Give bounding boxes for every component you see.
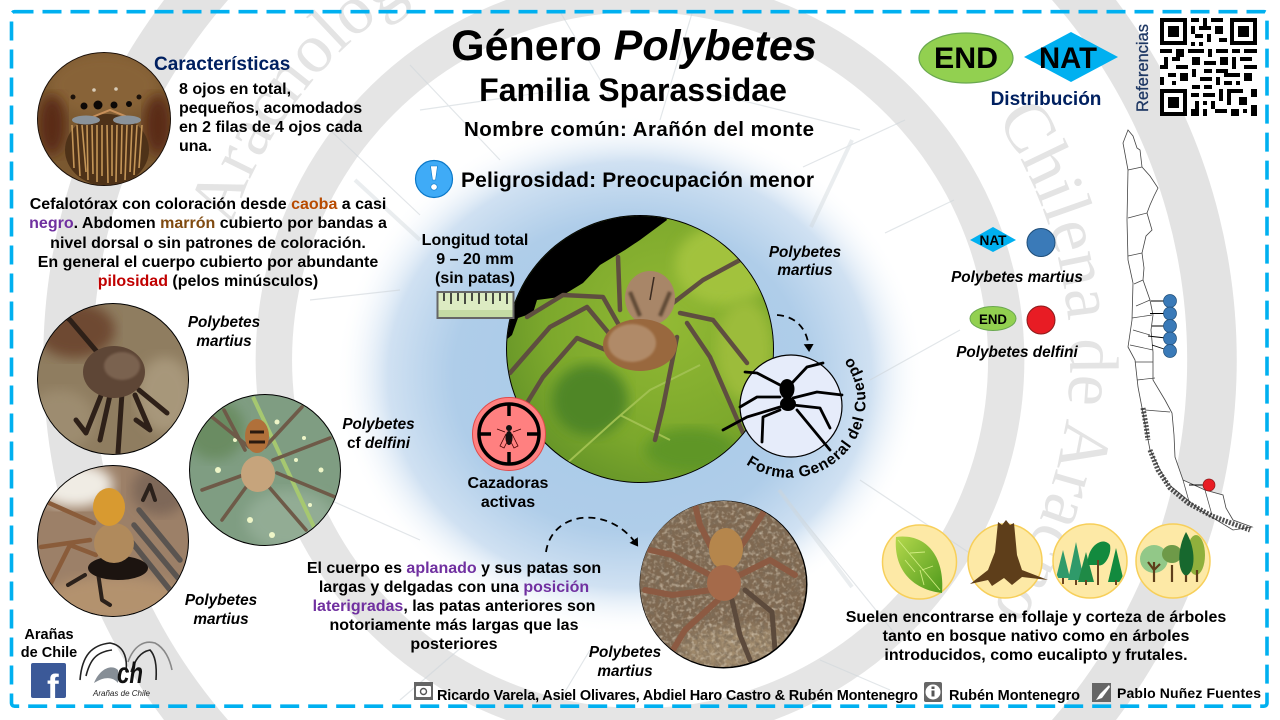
text credit: Rubén Montenegro [949,688,1080,704]
red distribution dot [1189,479,1215,491]
photo: Polybetes martius orange [37,463,189,624]
photo: Polybetes cf delfini [185,394,341,550]
icon: ruler [438,292,514,318]
text block: body shape: El cuerpo es aplanado y sus patas son [307,560,601,577]
credits [414,682,1261,704]
spider silhouette [723,363,842,450]
caption: Polybetes [188,314,260,331]
label: activas [481,494,535,511]
blue glow behind main photo [335,115,925,635]
photo: Polybetes martius dark [37,303,189,455]
society logo: Arañas de Chile [92,689,151,698]
dashed arrow to bottom photo [546,518,637,552]
blue dot [1027,228,1055,256]
caption [342,416,415,452]
text block: body shape: laterigradas, las patas anteriores son [313,598,595,615]
legend: Polybetes delfini [956,306,1079,361]
icon: camera [414,682,433,700]
eyes text: 8 ojos en total, [179,81,291,98]
caption [769,244,841,279]
title [451,22,817,141]
caption: martius [193,611,249,628]
icon: trunk [968,520,1048,598]
panel: characteristics [36,50,362,186]
text block: habitat: tanto en bosque nativo como en árboles [883,628,1189,645]
family name: Familia Sparassidae [479,72,787,108]
watermark: web lines [310,10,980,700]
badge: NAT: NAT [1039,42,1097,75]
badge: NAT small: NAT [980,232,1007,248]
danger text: Peligrosidad: Preocupación menor [461,169,814,192]
society logo [80,642,172,698]
caption [185,592,257,628]
eyes text: pequeños, acomodados [179,100,362,117]
references label: Referencias [1134,24,1152,112]
facebook page [21,627,77,707]
habitat icons [882,520,1210,599]
photo credit: Ricardo Varela, Asiel Olivares, Abdiel Haro Castro & Rubén Montenegro [437,688,918,704]
text block: habitat: Suelen encontrarse en follaje y corteza de árboles [846,609,1226,626]
title: Género Polybetes [451,22,817,70]
text block: coloration: nivel dorsal o sin patrones de coloración. [50,235,366,252]
heading: Características [154,54,290,75]
danger level [416,160,814,198]
text block: coloration: pilosidad (pelos minúsculos) [98,273,318,290]
region lines [1128,167,1212,515]
badge: END: END [934,42,998,75]
eyes text: una. [179,138,212,155]
facebook page: Arañas [24,627,74,643]
caption: Polybetes [185,592,257,609]
badge: END [919,33,1013,83]
QR code [1160,18,1257,116]
text block: coloration: Cefalotórax con coloración desde caoba a casi [30,196,386,213]
society logo: ch [117,657,143,690]
logo: Arañas de Chile [21,627,172,707]
common name: Nombre común: Arañón del monte [464,118,814,141]
eyes text [179,81,362,155]
caption: Polybetes [769,244,841,261]
legend: Polybetes martius [951,227,1083,286]
dashed arrow to body shape [777,315,809,350]
blue distribution dots [1148,294,1176,358]
text block: coloration: En general el cuerpo cubierto por abundante [38,254,378,271]
caption: martius [196,333,252,350]
icon: active hunters target [472,398,546,470]
map of Chile [1123,130,1252,530]
caption: Polybetes [589,644,661,661]
body length [422,232,528,318]
text block: coloration [29,196,387,290]
facebook page: f [47,668,59,707]
caption: cf delfini [347,435,411,452]
leaf [506,215,774,483]
body shape silhouette [722,354,866,478]
dark background corner [508,216,667,339]
distribution badges [919,32,1118,110]
label: Distribución [991,89,1101,110]
caption: Polybetes [342,416,415,433]
body length: (sin patas) [435,270,515,287]
red dot [1027,306,1055,334]
caption: martius [777,262,833,279]
main photo: Polybetes martius [500,205,775,483]
text block: body shape: posteriores [410,636,498,653]
icon: leaf [882,525,956,599]
text block: body shape: largas y delgadas con una posición [319,579,589,596]
caption: martius [597,663,653,680]
southern islands [1143,408,1250,530]
label [468,475,549,511]
facebook page: de Chile [21,645,77,661]
caption [188,314,260,350]
badge: NAT [1024,32,1118,82]
icon: alert [416,160,452,198]
body length: Longitud total [422,232,528,249]
eyes text: en 2 filas de 4 ojos cada [179,119,362,136]
icon: info [924,682,942,702]
icon: brush [1092,683,1111,702]
text block: body shape: notoriamente más largas que las [330,617,579,634]
text block: coloration: negro. Abdomen marrón cubierto por bandas a [29,215,387,232]
caption [589,644,661,680]
country outline [1123,130,1252,530]
text block: body shape [307,560,601,653]
curved label: Forma General del Cuerpo [746,358,866,478]
name: Polybetes martius [951,269,1083,286]
icon: native forest [1053,524,1127,598]
photo: spider face [36,50,172,186]
spider [510,257,747,440]
text block: habitat: introducidos, como eucalipto y frutales. [884,647,1188,664]
name: Polybetes delfini [956,344,1079,361]
badge: END small: END [979,311,1007,327]
illustration credit: Pablo Nuñez Fuentes [1117,685,1261,701]
bottom photo: Polybetes martius on mulch [639,500,808,674]
label: Cazadoras [468,475,549,492]
text block: habitat [846,609,1226,664]
body length: 9 – 20 mm [436,251,514,268]
watermark: society logo: Chilena de Aracno [998,104,1119,618]
icon: introduced trees [1136,524,1210,598]
